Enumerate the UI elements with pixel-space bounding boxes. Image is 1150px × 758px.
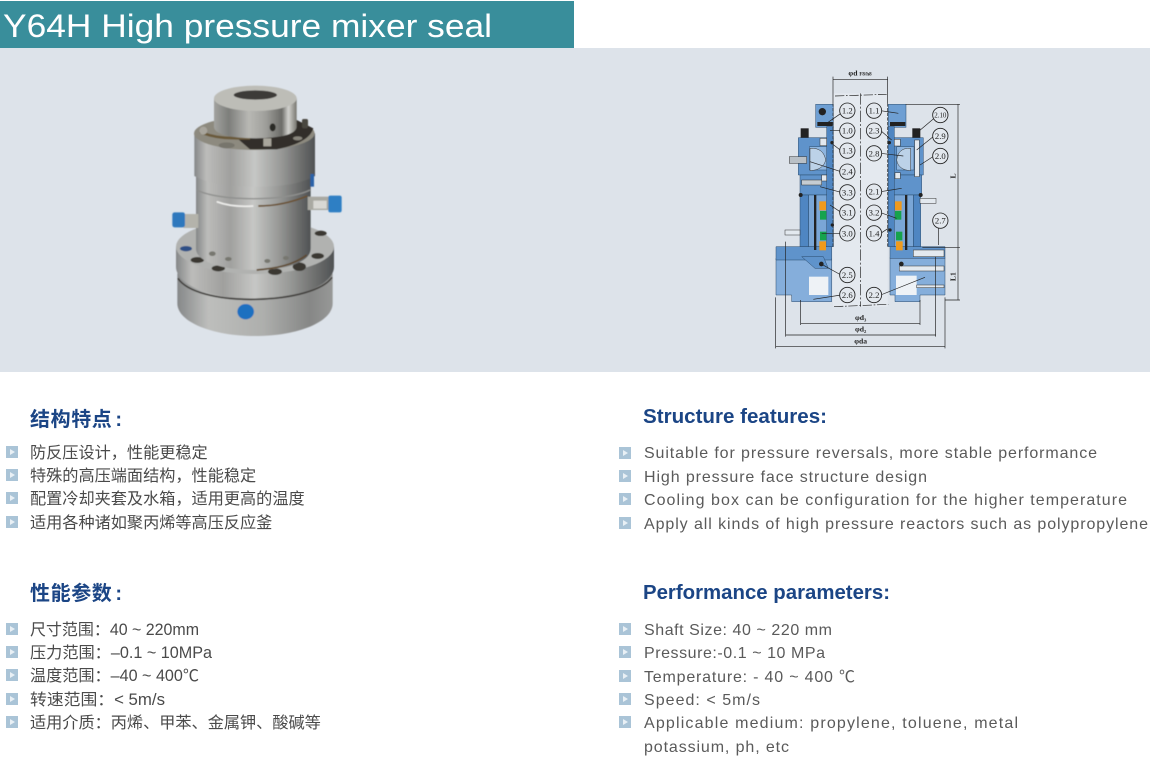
panel: English performance parameters bbox=[619, 582, 1018, 756]
bullet list: performance parameters CN: 压力范围：–0.1 ~ 10MPa bbox=[30, 644, 212, 662]
bullet list: performance parameters CN: 尺寸范围：40 ~ 220mm bbox=[30, 621, 199, 639]
flange bbox=[176, 247, 334, 299]
white cut-outs and studs bbox=[785, 138, 944, 295]
bullet list: performance parameters EN: Shaft Size: 40 ~ 220 mm bbox=[644, 622, 832, 639]
callout numbers: 2.5 bbox=[842, 270, 853, 280]
bullet list: structure features EN: High pressure face structure design bbox=[644, 469, 927, 486]
heading: structure features EN: Structure features: bbox=[643, 406, 827, 428]
bullet list: performance parameters EN: Pressure:-0.1 ~ 10 MPa bbox=[644, 645, 825, 662]
dimension labels bbox=[848, 68, 958, 345]
callout numbers: 1.4 bbox=[869, 228, 880, 238]
heading: structure features CN: 结构特点: bbox=[30, 408, 123, 431]
callout numbers: 2.9 bbox=[935, 131, 946, 141]
seal faces orange and green bbox=[819, 201, 903, 250]
bullet list: structure features EN bbox=[619, 445, 1148, 533]
bolts and dark details bbox=[799, 108, 923, 266]
heading: performance parameters CN: 性能参数: bbox=[30, 581, 123, 605]
dimension labels: φd F8/h8 bbox=[848, 68, 872, 77]
dimension labels: φda bbox=[854, 336, 867, 345]
callout numbers: 2.2 bbox=[869, 290, 879, 300]
dimension labels: φd₂ bbox=[855, 325, 867, 334]
right nozzle bbox=[308, 197, 329, 210]
cross-section drawing bbox=[776, 68, 960, 348]
flange bolt holes bbox=[180, 231, 327, 275]
leader lines bbox=[810, 111, 938, 299]
panel: Chinese structure features bbox=[6, 408, 305, 532]
bullet list: structure features EN: Apply all kinds of high pressure reactors such as polypropylene bbox=[644, 516, 1148, 533]
callout numbers: 2.10 bbox=[934, 112, 947, 120]
numbered callouts bbox=[840, 103, 948, 303]
bullet list: structure features CN: 防反压设计，性能更稳定 bbox=[30, 444, 208, 462]
bullet list: structure features CN: 适用各种诸如聚丙烯等高压反应釜 bbox=[30, 513, 272, 532]
product photo: mixer seal bbox=[172, 86, 342, 336]
callout numbers: 1.2 bbox=[842, 106, 853, 116]
left nozzle bbox=[183, 214, 198, 228]
panel: Chinese performance parameters bbox=[6, 581, 321, 732]
callout numbers: 2.1 bbox=[869, 187, 879, 197]
callout numbers: 2.4 bbox=[842, 167, 853, 177]
dimension labels: L1 bbox=[949, 272, 958, 281]
bullet list: performance parameters EN bbox=[619, 622, 1018, 756]
dimension labels: L bbox=[949, 173, 958, 179]
left half sections bbox=[776, 104, 833, 302]
bullet list: structure features EN: Cooling box can be configuration for the higher temperature bbox=[644, 492, 1127, 509]
callout numbers: 3.3 bbox=[842, 187, 853, 197]
callout numbers: 3.0 bbox=[842, 228, 853, 238]
bullet list: structure features EN: Suitable for pressure reversals, more stable performance bbox=[644, 445, 1097, 462]
callout numbers: 1.0 bbox=[842, 126, 853, 136]
callout numbers: 2.0 bbox=[935, 151, 946, 161]
shaft centre bbox=[833, 93, 888, 307]
bullet list: performance parameters EN: potassium, ph, etc bbox=[644, 739, 789, 756]
callout numbers: 2.7 bbox=[935, 216, 946, 226]
image band background bbox=[0, 48, 1150, 372]
title: Y64H High pressure mixer seal bbox=[3, 8, 492, 44]
callout numbers: 1.3 bbox=[842, 146, 853, 156]
title bar bbox=[0, 1, 574, 48]
bullet list: performance parameters EN: Temperature: - 40 ~ 400 ℃ bbox=[644, 669, 855, 686]
bullet list: performance parameters EN: Applicable medium: propylene, toluene, metal bbox=[644, 715, 1018, 732]
heading: performance parameters EN: Performance parameters: bbox=[643, 582, 890, 604]
blue plug bbox=[237, 304, 254, 319]
bullet list: structure features CN: 特殊的高压端面结构，性能稳定 bbox=[30, 467, 256, 485]
callout numbers: 2.8 bbox=[869, 148, 879, 158]
bullet list: performance parameters CN: 转速范围：< 5m/s bbox=[30, 691, 165, 709]
lower base bbox=[177, 273, 333, 336]
bullet list: structure features CN bbox=[6, 444, 305, 532]
bullet list: performance parameters CN bbox=[6, 621, 321, 732]
bullet list: performance parameters EN: Speed: < 5m/s bbox=[644, 692, 760, 709]
bullet list: performance parameters CN: 温度范围：–40 ~ 400℃ bbox=[30, 667, 199, 685]
dimension labels: φd₃ bbox=[855, 313, 867, 322]
top hub bbox=[214, 98, 297, 138]
callout numbers: 1.1 bbox=[869, 106, 879, 116]
bullet list: performance parameters CN: 适用介质：丙烯、甲苯、金属钾、酸碱等 bbox=[30, 714, 321, 732]
callout numbers: 2.3 bbox=[869, 126, 879, 136]
dimension lines bbox=[776, 77, 960, 348]
bullet list: structure features CN: 配置冷却夹套及水箱，适用更高的温度 bbox=[30, 490, 305, 508]
callout numbers: 2.6 bbox=[842, 290, 853, 300]
right half sections bbox=[888, 104, 945, 302]
callout numbers: 3.1 bbox=[842, 207, 853, 217]
callout numbers bbox=[842, 106, 947, 300]
main body upper bbox=[194, 133, 315, 187]
callout numbers: 3.2 bbox=[869, 208, 879, 218]
main body lower bbox=[196, 177, 311, 270]
panel: English structure features bbox=[619, 406, 1148, 533]
